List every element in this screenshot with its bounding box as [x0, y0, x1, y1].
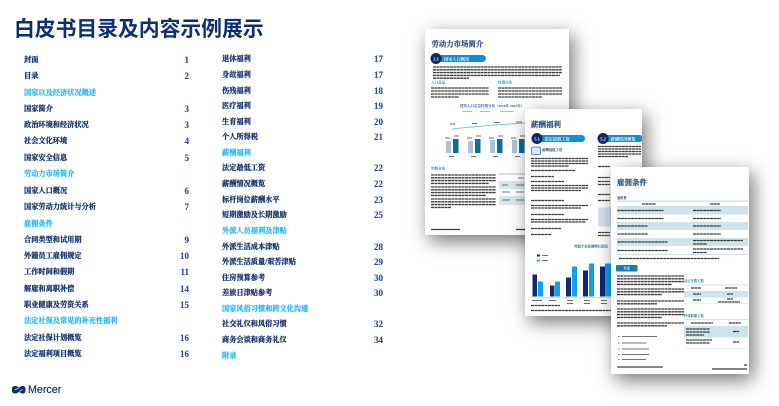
- chart title: 外籍专家薪酬增长情况: [574, 243, 609, 248]
- subheading: overtime: 加班费: [617, 195, 627, 200]
- toc row: [222, 288, 383, 298]
- toc section heading: 外派人员福利及津贴: [222, 226, 287, 234]
- toc row: [222, 100, 383, 110]
- toc row: [24, 186, 189, 196]
- toc row: 28: [374, 242, 383, 252]
- toc section heading: 国家风俗习惯和跨文化沟通: [222, 305, 308, 313]
- toc section heading: 劳动力市场简介: [24, 170, 74, 178]
- toc row: 11: [180, 267, 189, 277]
- toc row: 16: [180, 332, 189, 342]
- toc row: 法定福利项目概览: [24, 350, 82, 358]
- toc section heading: 国家以及经济状况概述: [24, 88, 96, 96]
- chart legend: [462, 110, 514, 112]
- toc row: 15: [180, 300, 189, 310]
- toc row: [222, 86, 383, 96]
- bar chart: statutory minimum wage: [531, 243, 611, 303]
- toc row: 19: [374, 100, 383, 110]
- chart legend: [537, 254, 540, 256]
- toc section heading: 附录: [222, 352, 236, 360]
- toc row: [24, 120, 189, 130]
- toc row: 差旅日津贴参考: [222, 289, 272, 297]
- column text right: [498, 88, 562, 97]
- toc row: 17: [374, 70, 383, 80]
- section badge 5.2: [598, 132, 643, 144]
- toc row: 14: [180, 284, 189, 294]
- age table: [499, 173, 525, 205]
- axis: [531, 296, 611, 298]
- subheading: gender distribution: 性别分布: [498, 80, 513, 84]
- toc row: 工作时间和假期: [24, 268, 74, 276]
- toc row: 4: [184, 136, 189, 146]
- toc row: [24, 251, 189, 261]
- toc row: 外派生活成本津贴: [222, 242, 280, 250]
- toc row: 职业健康及劳资关系: [24, 300, 89, 308]
- toc row: 住房预算参考: [222, 274, 265, 282]
- toc row: 30: [374, 288, 383, 298]
- bars: [446, 140, 517, 153]
- toc row: [222, 334, 383, 344]
- tag: expert tip: 专家: [623, 266, 631, 271]
- section badge 2.1: [430, 53, 486, 64]
- panel: sample page, compensation and benefits: [525, 108, 642, 316]
- Mercer logo: [12, 384, 62, 396]
- page title: 雇佣条件: [617, 177, 647, 187]
- toc row: 国家简介: [24, 104, 53, 112]
- toc row: 6: [184, 186, 189, 196]
- toc row: 9: [184, 234, 189, 244]
- toc row: 5: [184, 152, 189, 162]
- toc row: [24, 70, 189, 80]
- dark bars: [532, 266, 605, 296]
- toc row: 22: [374, 163, 383, 173]
- subheading: population total: 人口总量: [431, 80, 446, 84]
- toc row: 3: [184, 104, 189, 114]
- toc row: 封面: [24, 56, 38, 64]
- trend line: [452, 122, 540, 129]
- toc row: 外派生活质量/艰苦津贴: [222, 258, 296, 266]
- toc row: [24, 300, 189, 310]
- panel: sample page, labour market overview: [425, 29, 569, 235]
- toc row: 7: [184, 202, 189, 212]
- toc row: [24, 348, 189, 358]
- section badge 5.1: 5.1: [534, 136, 541, 141]
- intro text block: [433, 67, 562, 78]
- section badge 5.1: 法定最低工资: [544, 135, 570, 142]
- page title: 劳动力市场简介: [432, 40, 484, 48]
- toc row: [222, 70, 383, 80]
- section badge 2.1: 2.1: [433, 56, 440, 61]
- toc row: 生育福利: [222, 118, 251, 126]
- toc section heading: 雇佣条件: [24, 220, 53, 228]
- toc row: 政治环境和经济状况: [24, 120, 89, 128]
- toc row: 解雇和离职补偿: [24, 284, 74, 292]
- section badge 5.2: 5.2: [600, 136, 607, 141]
- toc row: 短期激励及长期激励: [222, 211, 287, 219]
- panel: sample page, employment conditions: [611, 167, 749, 374]
- toc row: [222, 242, 383, 252]
- column text left: [431, 88, 489, 97]
- bar labels: [445, 122, 525, 156]
- icon: document: [532, 146, 540, 154]
- page footer note: [531, 305, 611, 310]
- tag: expert tip: [616, 265, 638, 272]
- toc row: 2: [184, 70, 189, 80]
- table text: [618, 204, 743, 258]
- toc row: 20: [374, 116, 383, 126]
- toc row: 32: [374, 319, 383, 329]
- toc row: 25: [374, 210, 383, 220]
- toc row: [24, 267, 189, 277]
- toc row: 国家安全信息: [24, 154, 67, 162]
- toc row: [222, 163, 383, 173]
- toc row: 3: [184, 120, 189, 130]
- toc row: [222, 210, 383, 220]
- subheading: statutory annual leave: 法定年假天数: [684, 278, 704, 283]
- page footer: [431, 228, 525, 230]
- toc row: 10: [180, 251, 189, 261]
- toc row: 目录: [24, 72, 38, 80]
- toc row: 社交礼仪和风俗习惯: [222, 320, 287, 328]
- toc row: [222, 178, 383, 188]
- annual leave table: [684, 284, 748, 304]
- logo wordmark: Mercer: [28, 384, 61, 396]
- chart title: 建筑人口总量性别分布（2018年-2022年）: [460, 103, 524, 108]
- page footer: [617, 365, 747, 369]
- subheading: age distribution: 年龄分布: [431, 166, 446, 170]
- toc row: 薪酬情况概览: [222, 180, 265, 188]
- special leave table: [684, 319, 748, 348]
- toc row: 身故福利: [222, 70, 251, 78]
- toc row: [24, 54, 189, 64]
- toc row: [24, 234, 189, 244]
- toc row: 国家人口概况: [24, 186, 67, 194]
- icon: Mercer mark: [12, 386, 26, 394]
- toc row: 17: [374, 54, 383, 64]
- toc row: [222, 256, 383, 266]
- toc row: 34: [374, 334, 383, 344]
- toc row: [24, 202, 189, 212]
- population chart: [445, 103, 540, 156]
- toc row: 医疗福利: [222, 102, 251, 110]
- section badge 2.1: 国家人口概况: [444, 55, 470, 62]
- page title: 薪酬福利: [531, 118, 561, 128]
- toc row: [24, 152, 189, 162]
- toc row: 退休福利: [222, 55, 251, 63]
- toc row: 法定最低工资: [222, 164, 265, 172]
- toc row: 合同类型和试用期: [24, 236, 82, 244]
- axis labels: [532, 300, 607, 303]
- table of contents: left column: [24, 54, 189, 358]
- toc section heading: 法定社保及常见的补充性福利: [24, 317, 117, 325]
- toc row: 外籍员工雇佣规定: [24, 252, 82, 260]
- right column text block: [598, 146, 641, 235]
- title: 白皮书目录及内容示例展示: [14, 18, 264, 41]
- toc row: [222, 132, 383, 142]
- toc row: 18: [374, 86, 383, 96]
- section badge 5.1: [532, 132, 585, 144]
- toc row: 30: [374, 272, 383, 282]
- toc row: 国家劳动力统计与分析: [24, 202, 96, 210]
- section badge 5.2: 薪酬情况概览: [610, 135, 636, 142]
- toc row: 社会文化环境: [24, 137, 67, 145]
- toc row: [222, 272, 383, 282]
- toc row: 标杆岗位薪酬水平: [222, 196, 280, 204]
- toc row: [24, 332, 189, 342]
- toc row: 21: [374, 132, 383, 142]
- toc row: 22: [374, 178, 383, 188]
- toc row: [222, 116, 383, 126]
- toc row: 23: [374, 194, 383, 204]
- table of contents: right column: [222, 54, 383, 360]
- subheading: special leave: 特殊假期天数: [684, 313, 704, 318]
- toc row: [24, 284, 189, 294]
- toc section heading: 薪酬福利: [222, 148, 251, 156]
- overtime table: [617, 200, 748, 258]
- light bars: [538, 263, 611, 296]
- toc row: [24, 104, 189, 114]
- toc row: 个人所得税: [222, 133, 258, 141]
- toc row: 29: [374, 256, 383, 266]
- toc row: [222, 54, 383, 64]
- toc row: [222, 194, 383, 204]
- toc row: 伤残福利: [222, 86, 251, 94]
- text block: [617, 276, 684, 326]
- toc row: 1: [184, 54, 189, 64]
- toc row: 16: [180, 348, 189, 358]
- toc row: 商务会谈和商务礼仪: [222, 336, 287, 344]
- subheading: minimum wage: 薪酬最低工资: [542, 147, 563, 152]
- small table fragment: [598, 207, 611, 226]
- toc row: [222, 319, 383, 329]
- toc row: [24, 136, 189, 146]
- minimum wage text block: [531, 158, 588, 234]
- age text block: [431, 175, 496, 207]
- bullet list: [618, 336, 657, 360]
- toc row: 法定社保计划概览: [24, 334, 82, 342]
